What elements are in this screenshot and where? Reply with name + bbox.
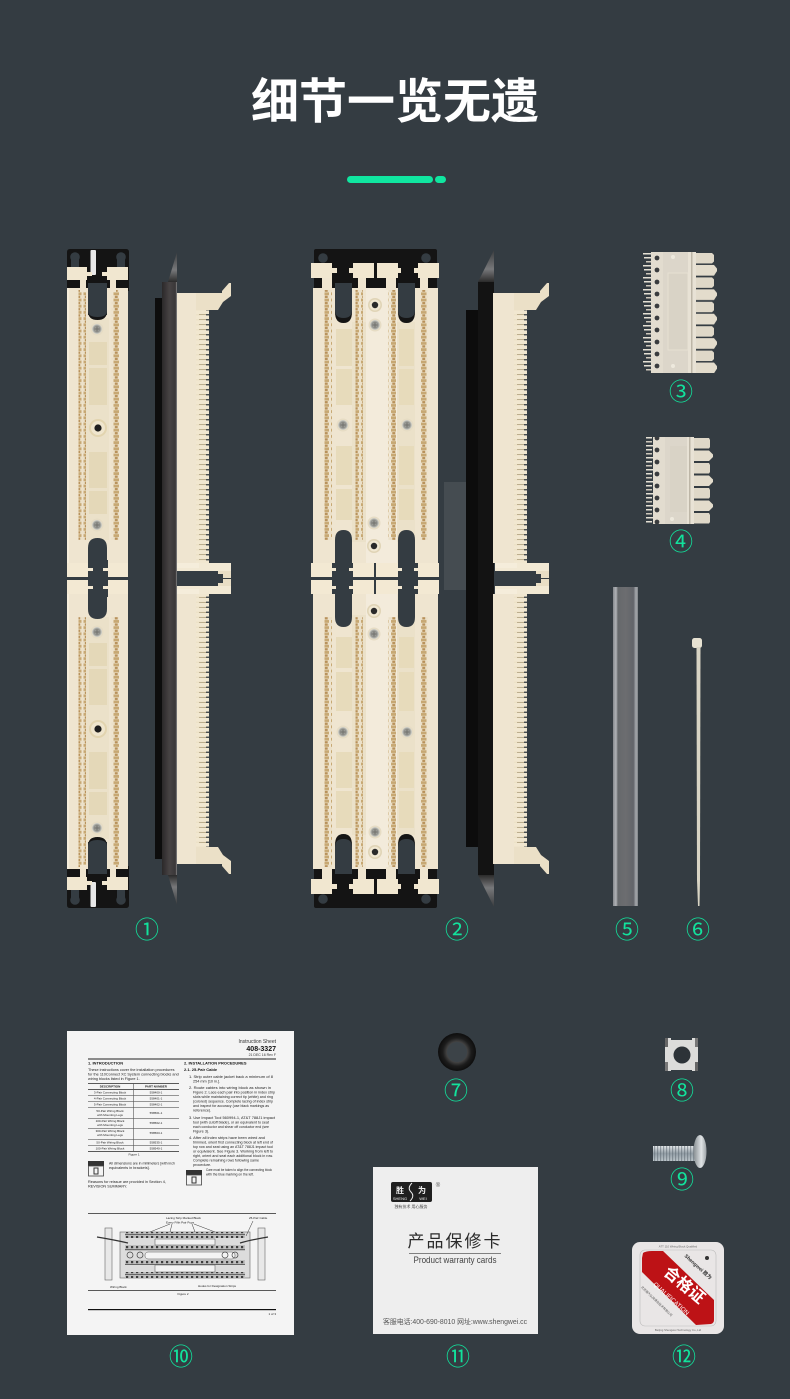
item 8: cage nut — [665, 1038, 698, 1071]
note text: with the blue marking on the left. — [206, 1172, 254, 1176]
parts table: Figure 1 — [128, 1152, 140, 1156]
installation steps: procedure. — [193, 1163, 211, 1167]
note text: equivalents in brackets]. — [109, 1166, 150, 1170]
installation steps: 254 mm [10 in.]. — [193, 1080, 220, 1084]
item 1: 100-pair wiring block front view — [67, 249, 129, 908]
parts table: 558535-1 — [150, 1140, 163, 1144]
item 5: clear tube — [613, 587, 638, 906]
item 10: instruction sheet: 2. INSTALLATION PROCEDURES — [184, 1060, 247, 1066]
item 10: instruction sheet: 1 of 3 — [268, 1312, 276, 1316]
item 10: instruction sheet: Instruction Sheet — [238, 1039, 277, 1045]
installation steps: Complete remaining rows following same — [193, 1158, 259, 1162]
parts table: with Mounting Legs — [97, 1133, 123, 1137]
note text: All dimensions are in millimeters [with inch — [109, 1162, 175, 1166]
figure 2 wiring diagram: Wiring Block — [110, 1285, 127, 1289]
number 5: ⑤ — [615, 910, 639, 945]
item 10: instruction sheet: 408-3327 — [246, 1046, 276, 1053]
number 8: ⑧ — [670, 1071, 694, 1106]
item 4: 4-pair connecting block — [646, 437, 713, 524]
parts table: 100-Pair Wiring Block — [96, 1146, 125, 1150]
accent bar — [347, 176, 446, 183]
item 1: wiring block side view — [155, 252, 231, 905]
title: 细节一览无遗 — [251, 62, 539, 132]
installation steps: trimmed, orient first connecting block at left end of — [193, 1140, 274, 1144]
parts table: 558401-1 — [150, 1096, 163, 1100]
parts table: 558562-1 — [150, 1121, 163, 1125]
brand logo: SHENG — [393, 1196, 407, 1201]
item 12: qualification certificate: 合格证 — [659, 1259, 712, 1308]
brand logo: WEI — [419, 1196, 427, 1201]
installation steps: or equivalent. See Figure 3. Working from left to — [193, 1150, 273, 1154]
note text: REVISION SUMMARY. — [88, 1184, 127, 1188]
item 11: product warranty card: 产品保修卡 — [408, 1227, 502, 1252]
parts table: 558561-1 — [150, 1111, 163, 1115]
brand logo: ® — [436, 1182, 441, 1189]
brand logo: 胜 — [396, 1185, 404, 1195]
brand logo: 为 — [418, 1185, 426, 1195]
item 11: product warranty card: Product warranty cards — [414, 1255, 497, 1266]
item 10: instruction sheet: Figure 2 — [177, 1292, 189, 1296]
number 7: ⑦ — [444, 1071, 468, 1106]
intro paragraph — [88, 1068, 179, 1081]
item 12: qualification certificate: Shengwei 胜为 — [683, 1253, 713, 1281]
number 2: ② — [445, 910, 469, 945]
number 3: ③ — [669, 372, 693, 407]
figure 2 wiring diagram — [97, 1216, 268, 1289]
intro paragraph: for the 110Connect XC System connecting blocks and — [88, 1072, 179, 1076]
note text: Care must be taken to align the connecting block — [206, 1168, 272, 1172]
parts table: 558540-1 — [150, 1146, 163, 1150]
parts table: 50-Pair Wiring Block — [96, 1140, 124, 1144]
figure 2 wiring diagram: Lacing Strip Marked Black — [166, 1216, 201, 1220]
installation steps: and inspect for accuracy (use black markings as — [193, 1104, 269, 1108]
item 2: wiring block side view — [466, 250, 549, 907]
item 10: instruction sheet — [67, 1031, 294, 1335]
parts table: 4-Pair Connecting Block — [94, 1096, 127, 1100]
number 10: ⑩ — [169, 1337, 193, 1372]
installation steps: 1. Strip outer cable jacket back a minimum of 8 — [189, 1075, 273, 1079]
item 12: qualification certificate: QUALIFICATION — [652, 1282, 690, 1317]
item 3: 5-pair connecting block — [643, 252, 717, 373]
item 11: product warranty card: 客服电话:400-690-8010 网址:www.shengwei.cc — [383, 1317, 527, 1326]
number 4: ④ — [669, 522, 693, 557]
item 10: instruction sheet: 21 DEC 16 Rev F — [249, 1053, 276, 1057]
installation steps: 2. Route cables into wiring block as shown in — [189, 1086, 271, 1090]
intro paragraph: These instructions cover the installation procedures — [88, 1068, 175, 1072]
number 6: ⑥ — [686, 910, 710, 945]
number 1: ① — [135, 910, 159, 945]
installation steps: Figure 2. Lace each pair into position in index strip — [193, 1090, 275, 1094]
parts table: 300-Pair Wiring Block — [96, 1129, 125, 1133]
parts table — [88, 1083, 179, 1156]
installation steps — [189, 1075, 276, 1167]
number 12: ⑫ — [672, 1337, 696, 1372]
parts table: 100-Pair Wiring Block — [96, 1119, 125, 1123]
note icons — [88, 1161, 202, 1185]
item 10: instruction sheet: 2.1. 25-Pair Cable — [184, 1067, 218, 1072]
item 7: rubber grommet — [438, 1033, 476, 1071]
brand logo: 独有技术 用心服务 — [394, 1203, 428, 1209]
brand logo — [391, 1182, 441, 1209]
parts table: PART NUMBER — [145, 1084, 168, 1088]
note text — [88, 1162, 272, 1188]
installation steps: Figure 3). — [193, 1130, 209, 1134]
number 11: ⑪ — [446, 1337, 470, 1372]
installation steps: right, orient and seat each additional block in row. — [193, 1154, 273, 1158]
installation steps: slots while maintaining correct tip (white) and ring — [193, 1095, 273, 1099]
parts table: 5-Pair Connecting Block — [94, 1102, 127, 1106]
parts table: 558402-1 — [150, 1102, 163, 1106]
parts table: 558400-1 — [150, 1090, 163, 1094]
item 12: qualification certificate: 北京胜为弘技通信技术有限公司 — [640, 1285, 674, 1317]
installation steps: 4. After all index strips have been wired and — [189, 1136, 265, 1140]
parts table: 50-Pair Wiring Block — [96, 1109, 124, 1113]
item 11: product warranty card — [373, 1167, 538, 1334]
figure 2 wiring diagram: 25-Pair Cable — [249, 1216, 268, 1220]
item 6: cable tie — [692, 638, 702, 906]
parts table: DESCRIPTION — [100, 1084, 120, 1088]
item 12: qualification certificate: Beijing Shengwei Technology Co.,Ltd — [655, 1328, 702, 1332]
intro paragraph: wiring blocks listed in Figure 1. — [88, 1077, 140, 1081]
item 9: mounting screw — [653, 1135, 706, 1168]
installation steps: tool (with cutoff blade), or an equivalent to seat — [193, 1120, 270, 1124]
parts table: 3-Pair Connecting Block — [94, 1090, 127, 1094]
number 9: ⑨ — [670, 1160, 694, 1195]
installation steps: each conductor and shear off conductor end (see — [193, 1125, 269, 1129]
item 2: 300-pair wiring block front view — [311, 249, 439, 908]
installation steps: (colored) sequence. Complete lacing of index strip — [193, 1100, 273, 1104]
item 2: shadow panel behind side view — [444, 482, 466, 590]
installation steps: top row and seat using an AT&T 788J1 impact tool — [193, 1145, 273, 1149]
installation steps: reference). — [193, 1108, 211, 1112]
item 10: instruction sheet: 1. INTRODUCTION — [88, 1060, 123, 1066]
item 12: qualification certificate: ATT 110 Wiring Block Qualified — [659, 1244, 698, 1248]
installation steps: 3. Use Impact Tool 560994-1, AT&T 788J1 impact — [189, 1116, 276, 1120]
figure 2 wiring diagram: Hooks for Designation Strips — [198, 1284, 237, 1288]
note text: Reasons for reissue are provided in Section 4, — [88, 1180, 166, 1184]
parts table: 558563-1 — [150, 1131, 163, 1135]
parts table: with Mounting Legs — [97, 1123, 123, 1127]
parts table: with Mounting Legs — [97, 1113, 123, 1117]
figure 2 wiring diagram: Every Fifth Pair Pups — [166, 1220, 195, 1224]
item 12: qualification certificate — [632, 1242, 724, 1334]
